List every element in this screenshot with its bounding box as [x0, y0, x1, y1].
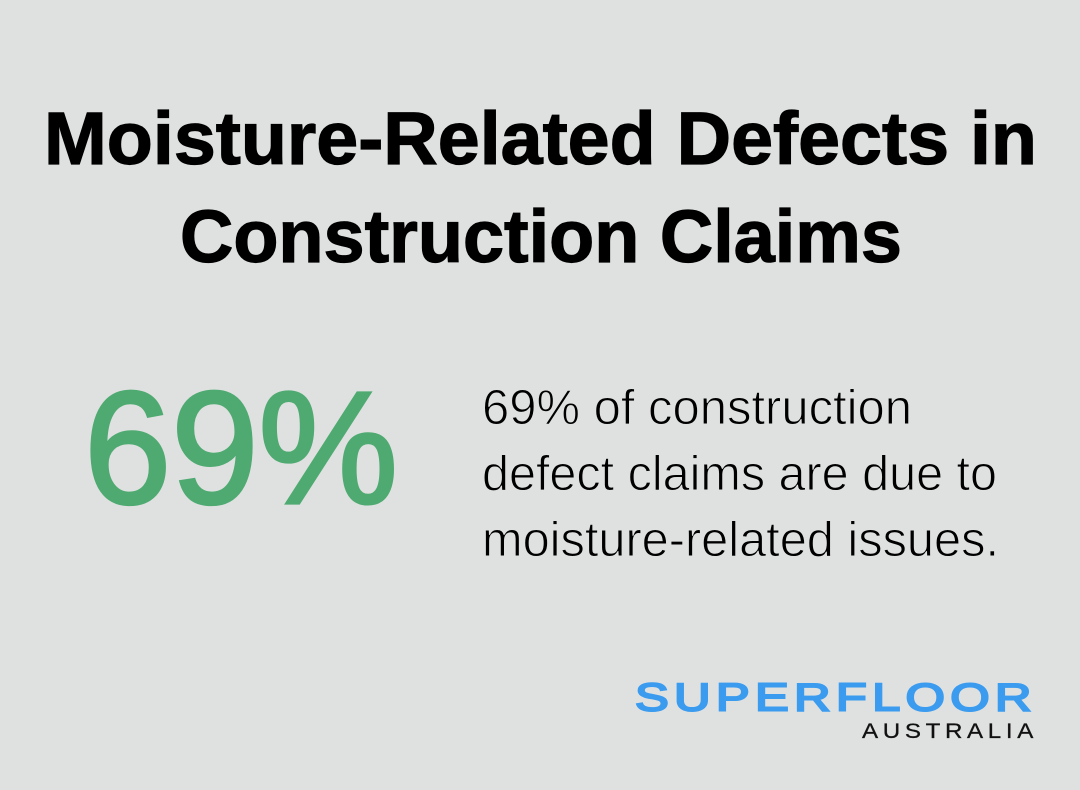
- statistic description: [482, 381, 999, 567]
- logo: Superfloor Australia: [635, 675, 1034, 743]
- title: Construction Claims: [180, 195, 902, 278]
- statistic description: defect claims are due to: [482, 447, 997, 501]
- title: [44, 97, 1037, 278]
- logo: Superfloor Australia: SUPERFLOOR: [635, 675, 1032, 719]
- big statistic: 69%: 69%: [84, 358, 398, 537]
- title: Moisture-Related Defects in: [44, 97, 1037, 180]
- statistic description: 69% of construction: [482, 381, 912, 435]
- statistic description: moisture-related issues.: [482, 513, 999, 567]
- logo: Superfloor Australia: AUSTRALIA: [862, 719, 1034, 743]
